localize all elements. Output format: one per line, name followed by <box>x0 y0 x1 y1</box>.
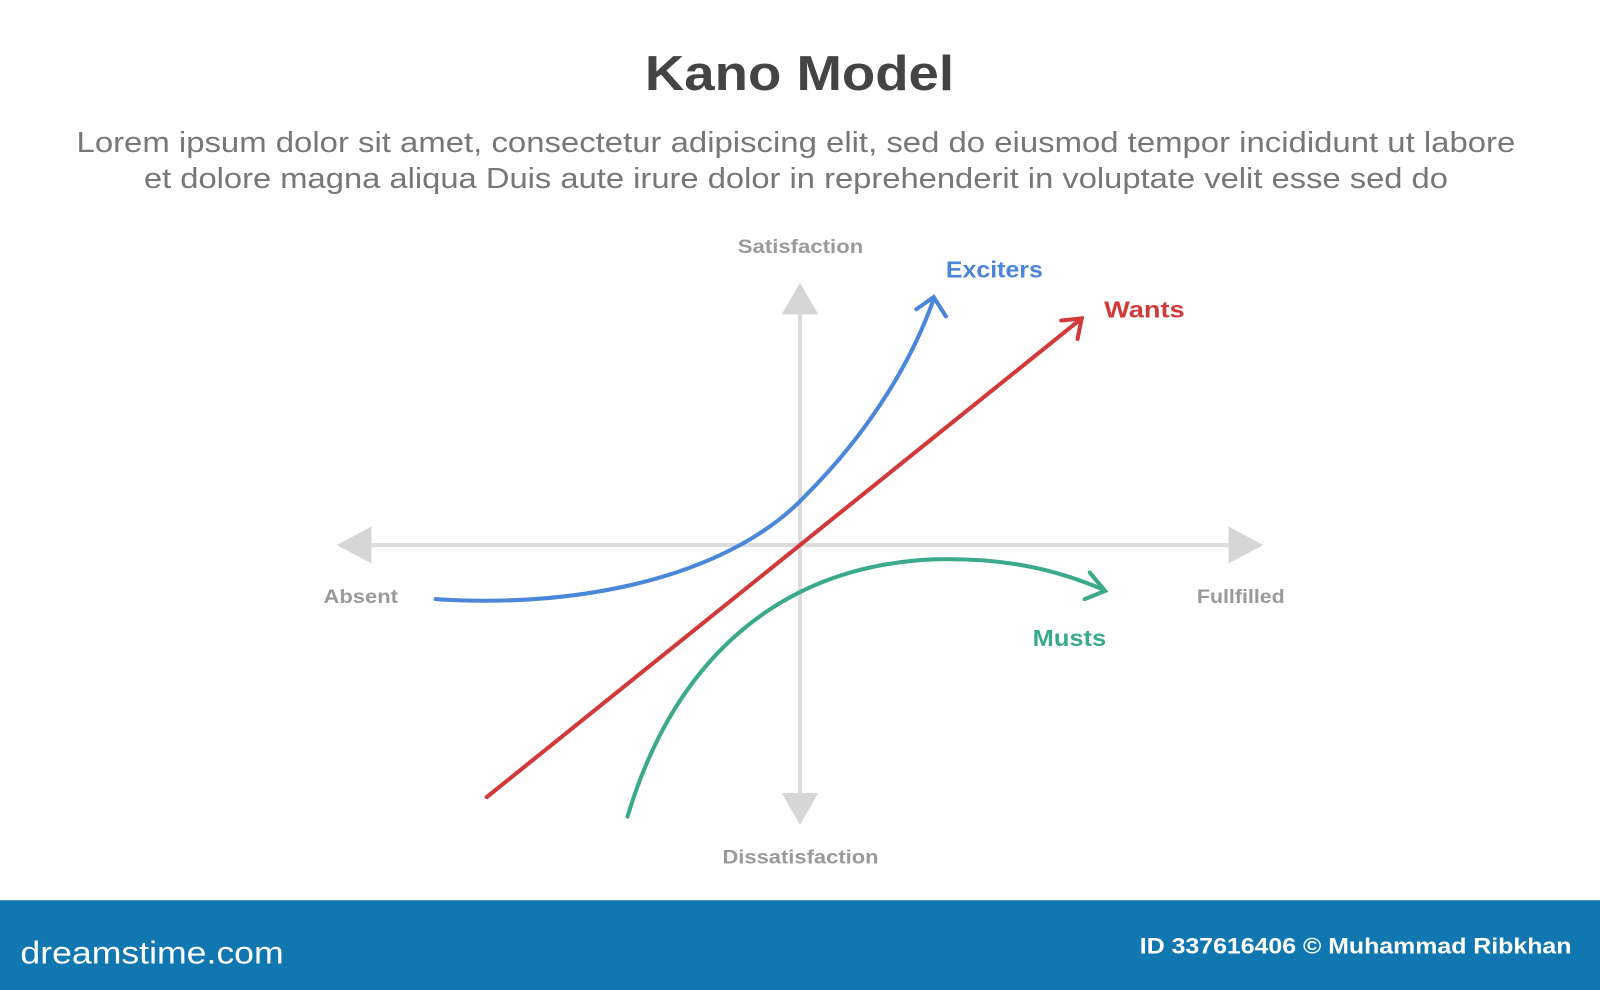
curve: exciters <box>436 297 946 601</box>
axis labels <box>323 236 1285 868</box>
axis labels: Absent <box>323 586 399 608</box>
label: wants: Wants <box>1104 296 1185 322</box>
chart: kano axes <box>337 283 1263 825</box>
axis labels: Satisfaction <box>738 236 863 258</box>
title: Kano Model <box>645 47 954 101</box>
label: exciters: Exciters <box>946 257 1043 283</box>
footer bar: ID 337616406 © Muhammad Ribkhan <box>1140 933 1571 958</box>
subtitle text: et dolore magna aliqua Duis aute irure dolor in reprehenderit in voluptate velit esse sed do <box>144 163 1448 195</box>
footer bar: dreamstime.com <box>20 934 284 970</box>
subtitle text <box>77 127 1515 195</box>
subtitle text: Lorem ipsum dolor sit amet, consectetur adipiscing elit, sed do eiusmod tempor incididunt ut labore <box>77 127 1515 159</box>
axis labels: Fullfilled <box>1197 586 1285 608</box>
curve: wants <box>487 318 1082 797</box>
label: musts: Musts <box>1033 625 1106 651</box>
axis labels: Dissatisfaction <box>722 846 879 868</box>
footer bar <box>0 900 1600 990</box>
curve: musts <box>628 559 1105 816</box>
